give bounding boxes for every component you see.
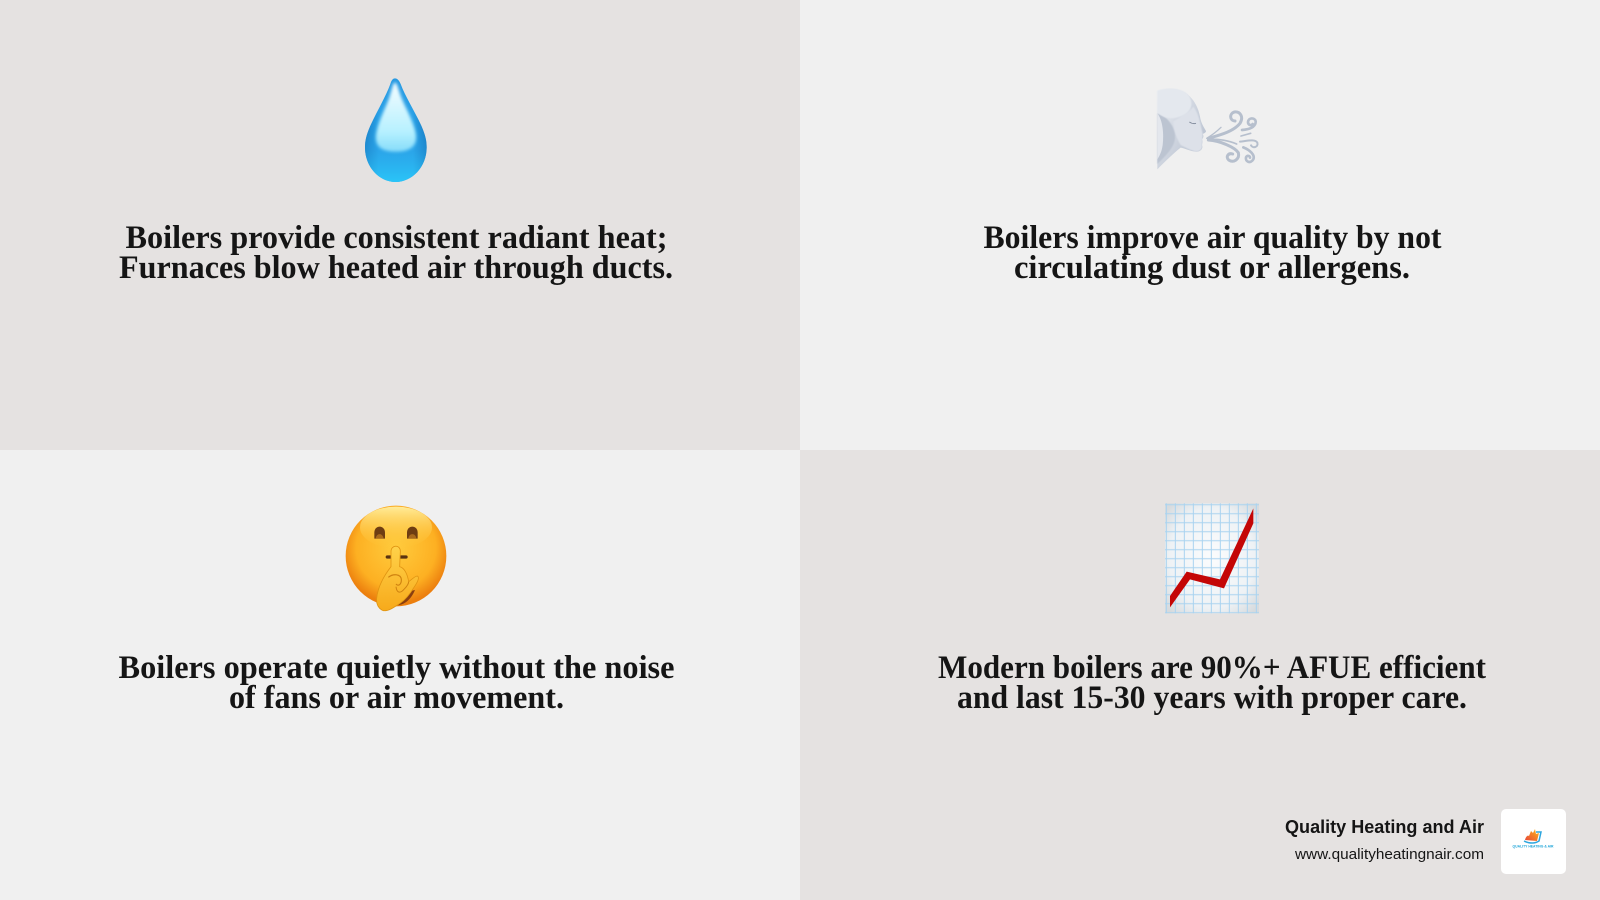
icon: shushing face (346, 506, 446, 611)
text: air quality statement: Boilers improve air quality by not (984, 220, 1442, 256)
logo card: QUALITY HEATING & AIR (1512, 844, 1554, 848)
text: efficiency statement: and last 15-30 years with proper care. (957, 680, 1467, 716)
text: efficiency statement (938, 650, 1486, 716)
text: quiet operation statement (118, 650, 674, 716)
text: radiant heat statement (119, 220, 673, 286)
icon: rising chart (1165, 503, 1259, 613)
text: quiet operation statement: Boilers operate quietly without the noise (118, 650, 674, 686)
panel: air quality (800, 0, 1600, 450)
icon: water drop (365, 78, 427, 182)
panel: quiet operation (0, 450, 800, 900)
text: radiant heat statement: Boilers provide consistent radiant heat; (126, 220, 668, 256)
brand block (1285, 809, 1566, 874)
logo card (1501, 809, 1566, 874)
text: efficiency statement: Modern boilers are 90%+ AFUE efficient (938, 650, 1486, 686)
company name: Quality Heating and Air (1285, 817, 1484, 837)
website: www.qualityheatingnair.com (1294, 846, 1484, 863)
text: quiet operation statement: of fans or air movement. (229, 680, 564, 716)
text: radiant heat statement: Furnaces blow heated air through ducts. (119, 250, 673, 286)
text: air quality statement: circulating dust or allergens. (1014, 250, 1410, 286)
panel: efficiency (800, 450, 1600, 900)
text: air quality statement (984, 220, 1442, 286)
icon: wind face (1157, 89, 1258, 169)
panel: radiant heat (0, 0, 800, 450)
